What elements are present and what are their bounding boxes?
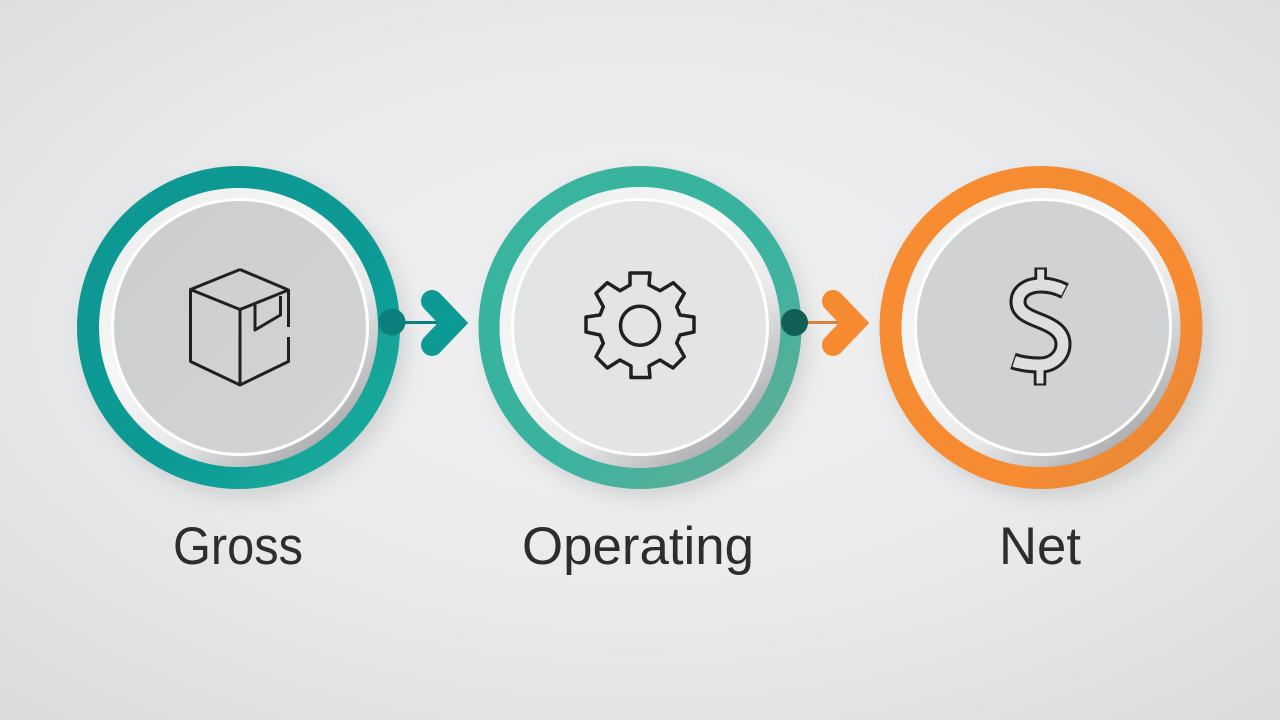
grey inner disc bbox=[512, 200, 768, 454]
raised white rim bbox=[500, 187, 780, 468]
step: Gross bbox=[77, 166, 400, 576]
connector line bbox=[400, 321, 442, 324]
label: Net: Net bbox=[999, 517, 1081, 576]
arrow: Operating to Net bbox=[781, 301, 854, 345]
connector line bbox=[806, 321, 844, 324]
teal outer ring bbox=[77, 166, 400, 489]
step: Net bbox=[880, 166, 1202, 576]
icon: dollar sign bbox=[1013, 268, 1065, 386]
label: Operating: Operating bbox=[522, 517, 754, 576]
grey inner disc bbox=[112, 200, 368, 454]
icon: gear bbox=[586, 273, 694, 378]
raised white rim bbox=[902, 188, 1180, 467]
label: Gross: Gross bbox=[173, 517, 303, 576]
connector node bbox=[378, 308, 406, 336]
orange outer ring bbox=[880, 166, 1202, 489]
connector node bbox=[781, 309, 808, 336]
icon: box bbox=[190, 270, 288, 385]
step: Operating bbox=[478, 166, 802, 576]
green outer ring bbox=[478, 166, 802, 489]
raised white rim bbox=[99, 188, 378, 467]
chevron bbox=[432, 301, 453, 345]
arrow: Gross to Operating bbox=[378, 301, 453, 345]
grey inner disc bbox=[916, 200, 1170, 454]
chevron bbox=[833, 301, 854, 345]
